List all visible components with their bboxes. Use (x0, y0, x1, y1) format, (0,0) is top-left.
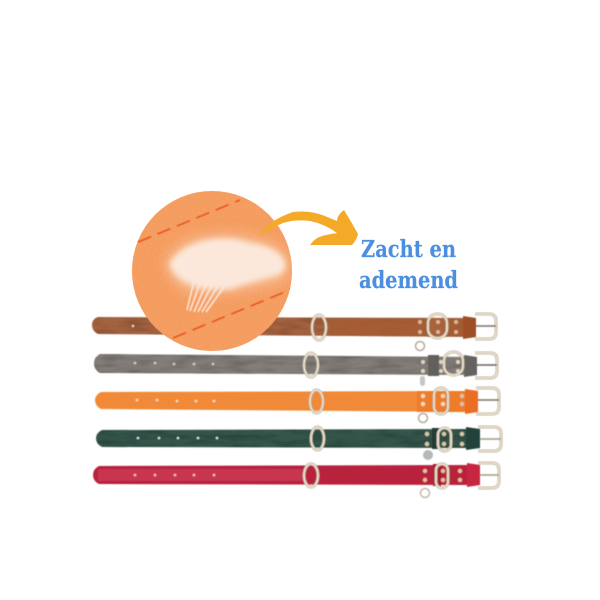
caption: ademend (359, 267, 458, 294)
collar: red (93, 463, 499, 498)
arrow (258, 210, 358, 245)
soft white tuft (170, 238, 285, 289)
collar: brown (92, 314, 496, 350)
stitching lines (138, 200, 292, 338)
fabric close-up circle (130, 190, 294, 354)
soft halo around tuft (165, 235, 289, 294)
collar: gray (94, 352, 497, 386)
caption: Zacht en (361, 236, 456, 263)
caption (359, 236, 458, 294)
white fibres (187, 281, 224, 312)
collar: green (96, 427, 501, 460)
collar: orange (95, 388, 499, 422)
